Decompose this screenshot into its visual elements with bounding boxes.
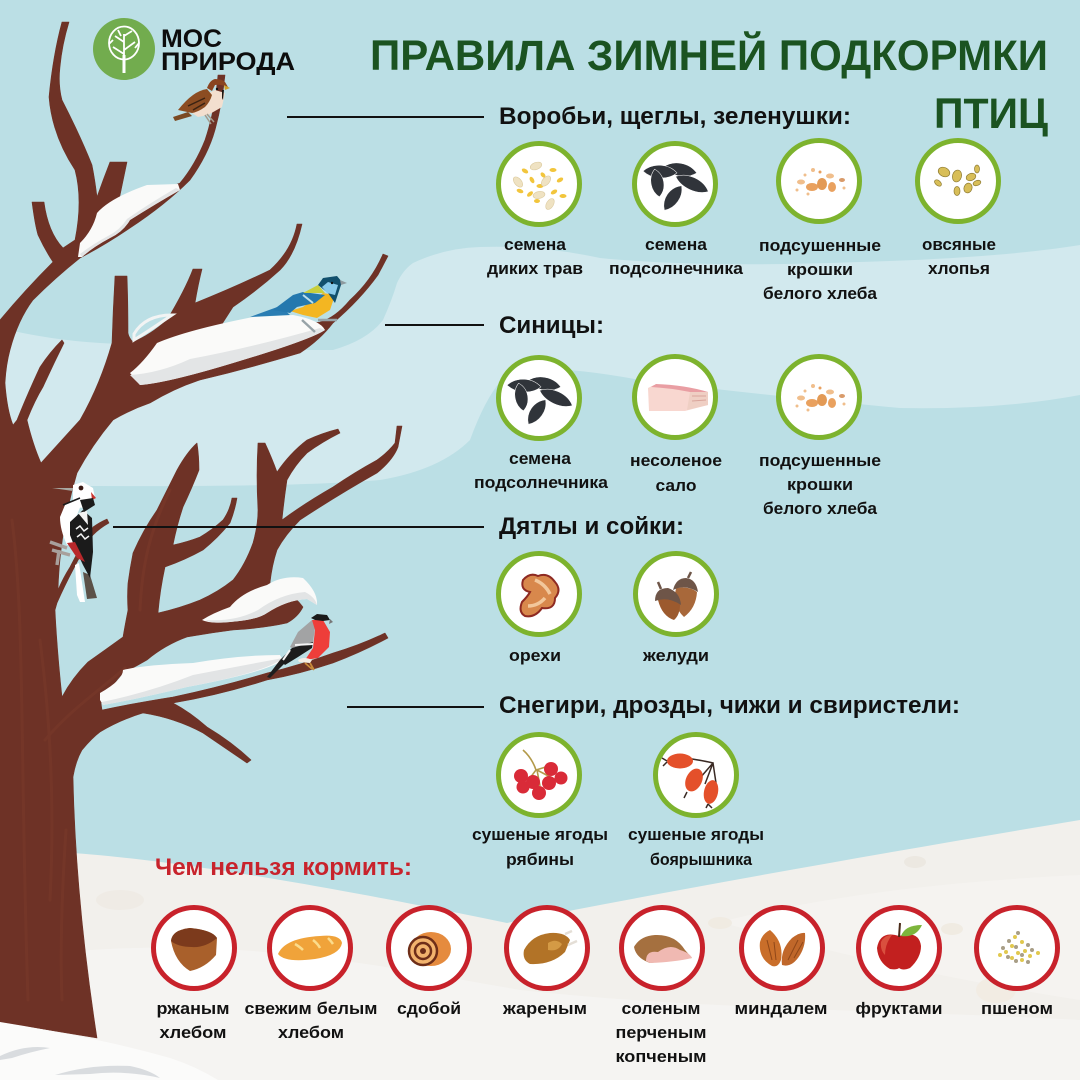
panel: woodpeckers and jays group	[113, 513, 716, 665]
item: rye bread	[154, 908, 234, 988]
heading: Синицы:	[499, 312, 604, 339]
label: bread crumbs: крошки	[787, 261, 853, 279]
label: rowan berries: сушеные ягоды	[472, 826, 608, 844]
tree	[0, 22, 402, 1038]
label: unsalted lard: несоленое	[630, 452, 722, 470]
label: salted smoked meat: копченым	[616, 1048, 706, 1066]
item: sunflower seeds	[634, 144, 716, 224]
item: wild herb seeds	[498, 144, 580, 224]
label: sunflower seeds: подсолнечника	[609, 260, 744, 278]
label: rye bread	[156, 1000, 230, 1042]
heading: Снегири, дрозды, чижи и свиристели:	[499, 692, 960, 719]
panel: tits group	[385, 312, 881, 518]
label: sunflower seeds	[474, 450, 609, 492]
connector line	[385, 324, 484, 326]
heading: Воробьи, щеглы, зеленушки:	[499, 103, 851, 130]
label: rowan berries: рябины	[506, 851, 574, 869]
label: hawthorn berries	[628, 826, 764, 869]
label: fresh white bread: хлебом	[278, 1024, 344, 1042]
bird: sparrow	[173, 79, 230, 124]
bird: bullfinch	[267, 614, 333, 678]
heading: Дятлы и сойки:	[499, 513, 684, 540]
label: sunflower seeds: подсолнечника	[474, 474, 609, 492]
label: salted smoked meat: перченым	[616, 1024, 706, 1042]
connector line	[113, 526, 484, 528]
logo wordmark: МОС	[161, 25, 222, 53]
label: hawthorn berries: сушеные ягоды	[628, 826, 764, 844]
connector line	[347, 706, 484, 708]
snow at tree base	[0, 1022, 218, 1080]
label: sunflower seeds: семена	[645, 236, 708, 254]
label: sunflower seeds	[609, 236, 744, 278]
item: rowan berries	[498, 734, 580, 816]
label: oat flakes: овсяные	[922, 236, 996, 254]
item: bread crumbs	[778, 140, 860, 222]
label: wild herb seeds: диких трав	[487, 260, 583, 278]
label: hawthorn berries: боярышника	[650, 851, 753, 869]
bird: woodpecker	[50, 482, 97, 602]
label: salted smoked meat: соленым	[622, 1000, 700, 1018]
label: oat flakes	[922, 236, 996, 278]
logo	[93, 18, 295, 80]
label: acorns: желуди	[642, 647, 709, 665]
item: hawthorn berries	[656, 734, 736, 816]
label: wild herb seeds	[487, 236, 583, 278]
label: rowan berries	[472, 826, 608, 869]
item: oat flakes	[918, 140, 998, 222]
logo wordmark	[161, 25, 295, 76]
label: bread crumbs	[759, 452, 881, 518]
label: fruits: фруктами	[856, 1000, 942, 1018]
label: almonds: миндалем	[734, 1000, 828, 1018]
label: oat flakes: хлопья	[928, 260, 990, 278]
label: rye bread: хлебом	[160, 1024, 226, 1042]
panel: sparrows group	[287, 103, 998, 303]
snow on branches	[78, 184, 325, 705]
item: bread crumbs	[778, 356, 860, 438]
label: sweet bun: сдобой	[397, 1000, 461, 1018]
connector line	[287, 116, 484, 118]
item: acorns	[636, 554, 716, 634]
item: millet	[976, 908, 1058, 988]
item: almonds	[742, 908, 822, 988]
label: salted smoked meat	[616, 1000, 706, 1066]
bird: tit	[250, 276, 347, 332]
label: wild herb seeds: семена	[504, 236, 567, 254]
title	[370, 31, 1049, 138]
item: walnuts	[498, 554, 580, 634]
panel: what not to feed	[154, 854, 1058, 1066]
label: bread crumbs: белого хлеба	[763, 500, 878, 518]
item: fresh white bread	[270, 908, 350, 988]
label: bread crumbs	[759, 237, 881, 303]
item: fried meat	[506, 908, 588, 988]
label: bread crumbs: подсушенные	[759, 452, 881, 470]
title: ПРАВИЛА ЗИМНЕЙ ПОДКОРМКИ	[370, 31, 1048, 80]
label: fried meat: жареным	[502, 1000, 587, 1018]
heading: Чем нельзя кормить:	[155, 854, 412, 881]
title: ПТИЦ	[934, 90, 1049, 138]
item: salted smoked meat	[622, 908, 702, 988]
label: unsalted lard: сало	[656, 477, 696, 495]
label: millet: пшеном	[981, 1000, 1053, 1018]
item: sunflower seeds	[498, 358, 580, 438]
label: unsalted lard	[630, 452, 722, 495]
label: bread crumbs: белого хлеба	[763, 285, 878, 303]
label: fresh white bread: свежим белым	[244, 1000, 378, 1018]
background light cloud band	[0, 245, 1080, 486]
label: bread crumbs: крошки	[787, 476, 853, 494]
label: fresh white bread	[244, 1000, 378, 1042]
label: walnuts: орехи	[509, 647, 561, 665]
label: rye bread: ржаным	[156, 1000, 230, 1018]
item: unsalted lard	[634, 356, 716, 438]
label: sunflower seeds: семена	[509, 450, 572, 468]
panel: bullfinches group	[347, 692, 960, 869]
background snow ground	[0, 820, 1080, 1080]
item: fruits (apple)	[858, 908, 940, 988]
item: sweet bun	[388, 908, 470, 988]
logo wordmark: ПРИРОДА	[161, 48, 295, 76]
label: bread crumbs: подсушенные	[759, 237, 881, 255]
